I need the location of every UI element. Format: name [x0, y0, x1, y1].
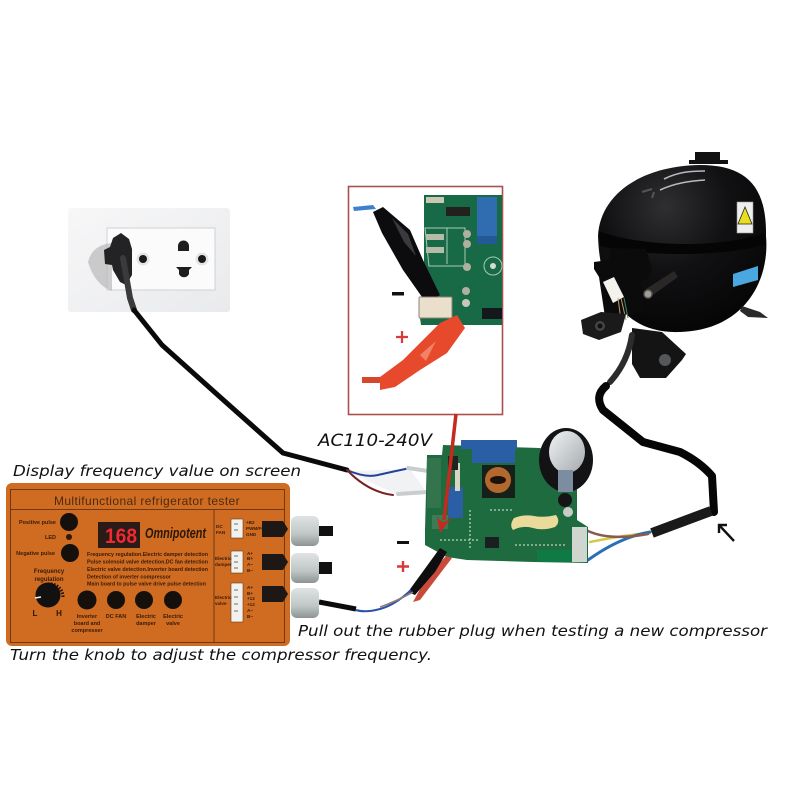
connector sockets: B+: [247, 591, 253, 596]
connector sockets: +12: [247, 596, 255, 601]
connector sockets: FAN: [216, 530, 226, 535]
red arrow from inset to board: [437, 414, 456, 533]
pulse controls: Negative pulse: [16, 551, 55, 557]
function buttons: Electric: [136, 614, 156, 620]
connector sockets: +12: [247, 602, 255, 607]
connector sockets: A+: [247, 551, 253, 556]
feature list: Electric valve detection.Inverter board detection: [87, 567, 209, 573]
connector sockets: +B2: [246, 520, 255, 525]
function buttons: board and: [74, 621, 100, 627]
wall outlet: [68, 208, 230, 312]
cable glands: [291, 516, 333, 618]
connector sockets: B−: [247, 568, 253, 573]
board plus sign: [397, 561, 409, 572]
caption: knob: Turn the knob to adjust the compressor frequency.: [10, 646, 432, 664]
function buttons: Inverter: [77, 614, 98, 620]
connector sockets: A−: [247, 562, 253, 567]
inset photo frame: [348, 186, 502, 414]
pulse controls: [16, 513, 79, 562]
compressor: [581, 152, 768, 378]
feature list: [87, 552, 209, 588]
caption: display: Display frequency value on screen: [13, 462, 301, 480]
connector sockets: PWM/FG: [246, 526, 265, 531]
tester device: [6, 483, 290, 646]
brand name: Omnipotent: [145, 525, 207, 542]
function buttons: damper: [136, 621, 157, 627]
inset circuit board: [420, 195, 502, 325]
connector sockets: B+: [247, 556, 253, 561]
function buttons: valve: [166, 621, 180, 627]
feature list: Frequency regulation.Electric damper detection: [87, 552, 209, 558]
function buttons: Electric: [163, 614, 183, 620]
connector sockets: Electric: [215, 595, 232, 600]
black alligator clip: [353, 205, 440, 298]
connector sockets: DC: [216, 524, 223, 529]
connector sockets: valve: [215, 601, 227, 606]
connector sockets: [215, 519, 265, 622]
pulse controls: LED: [45, 535, 56, 541]
feature list: Detection of inverter compressor: [87, 574, 172, 580]
connector sockets: B−: [247, 614, 253, 619]
connector sockets: GND: [246, 532, 257, 537]
pulse controls: Positive pulse: [19, 520, 56, 526]
frequency knob: regulation: [34, 577, 64, 583]
black cable tags: [262, 521, 288, 602]
power plug: [104, 233, 132, 285]
arrow pointing at cable: [719, 525, 734, 541]
feature list: Main board to pulse valve drive pulse detection: [87, 582, 207, 588]
feature list: Pulse solenoid valve detection.DC fan detection: [87, 560, 209, 566]
toroid coil: [485, 467, 511, 493]
inset minus sign: [392, 292, 404, 296]
inset plus sign: [396, 331, 408, 343]
compressor cable: [588, 335, 714, 560]
inverter board: [425, 428, 593, 563]
caption: rubber plug: Pull out the rubber plug when testing a new compressor: [298, 622, 768, 640]
tester title: Multifunctional refrigerator tester: [54, 494, 240, 508]
frequency knob: Frequency: [34, 569, 65, 575]
function buttons: compresser: [71, 628, 103, 634]
connector sockets: A+: [247, 585, 253, 590]
frequency knob: L: [33, 609, 38, 618]
function buttons: DC FAN: [106, 614, 126, 620]
red alligator clip: [362, 315, 465, 390]
frequency display: 168: [105, 525, 137, 548]
connector sockets: A−: [247, 608, 253, 613]
function buttons: [71, 590, 183, 634]
frequency knob: H: [56, 609, 62, 618]
connector sockets: Electric: [215, 556, 232, 561]
mains cable: [123, 258, 428, 495]
board minus sign: [397, 541, 409, 544]
white connector: [419, 297, 452, 318]
blue capacitors: [448, 440, 517, 518]
electrolytic capacitor: [539, 428, 593, 492]
frequency knob: [33, 569, 65, 618]
caption: voltage: AC110-240V: [317, 431, 433, 451]
connector sockets: damper: [215, 562, 232, 567]
board test clips: [319, 548, 452, 611]
